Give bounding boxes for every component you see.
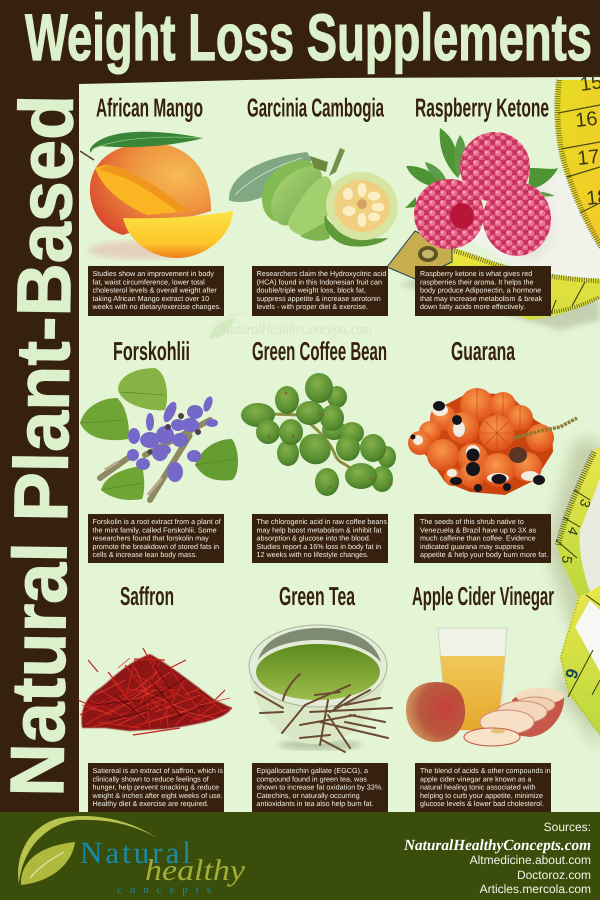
measuring tape: upper right: 16 xyxy=(574,108,599,132)
text: Green Coffee description: may help boost metabolism & inhibit fat xyxy=(256,525,382,534)
heading: Saffron: Saffron xyxy=(120,581,174,611)
text: Forskohlii description xyxy=(88,514,224,563)
text: Saffron description: hunger, help prevent snacking & reduce xyxy=(92,783,219,792)
text: Forskohlii description: researchers found that forskolin may xyxy=(92,534,209,543)
text: Green Tea description: compound found in green tea, was xyxy=(256,774,367,783)
text: Apple Cider description: glucose levels & lower bad cholesterol. xyxy=(420,799,544,808)
text: Forskohlii description: the mint family, called Forskohlii. Some xyxy=(92,525,217,534)
measuring tape: upper right: 17 xyxy=(576,146,600,170)
panel: Apple Cider Vinegar xyxy=(406,581,564,812)
text: Garcinia description: (HCA) found in this Indonesian fruit can xyxy=(256,277,382,286)
heading: Garcinia Cambogia: Garcinia Cambogia xyxy=(247,92,384,122)
logo: Natural Healthy Concepts: concepts xyxy=(117,884,211,896)
text: Saffron description: clinically shown to reduce feelings of xyxy=(92,774,209,783)
text: Guarana description: appetite & help your body burn more fat. xyxy=(420,550,548,559)
measuring tape: right side middle: 9 xyxy=(562,666,583,681)
icon: saffron pile xyxy=(78,648,232,735)
logo: Natural Healthy Concepts xyxy=(18,816,246,896)
text: Green Coffee description: The chlorogenic acid in raw coffee beans xyxy=(256,517,387,526)
text: Forskohlii description: promote the breakdown of stored fats in xyxy=(92,542,219,551)
text: Apple Cider description: natural healing tonic associated with xyxy=(420,783,535,792)
text: Garcinia description xyxy=(252,266,388,316)
text: Garcinia description: suppress appetite & increase serotonin xyxy=(256,294,381,303)
measuring tape: upper right xyxy=(470,71,600,282)
text: Green Coffee description: Studies report a 16% loss in body fat in xyxy=(256,542,381,551)
text: Saffron description: Healthy diet & exercise are required. xyxy=(92,799,209,808)
text: African Mango description xyxy=(88,266,224,316)
text: Green Coffee description xyxy=(252,514,388,563)
text: African Mango description: fat, waist circumference, lower total xyxy=(92,277,205,286)
text: Saffron description: Satiereal is an extract of saffron, which is xyxy=(92,766,223,775)
heading: Green Coffee Bean: Green Coffee Bean xyxy=(252,336,387,366)
text: Raspberry description: body produce Adiponectin, a hormone xyxy=(420,286,541,295)
text: Guarana description: indicated guarana may suppress xyxy=(420,542,524,551)
text: Saffron description xyxy=(88,763,224,812)
text: Raspberry description: that may increase metabolism & break xyxy=(420,294,543,303)
text: Garcinia description: Researchers claim the Hydroxycitric acid xyxy=(256,269,386,278)
icon: garcinia fruit xyxy=(229,148,406,248)
icon: guarana berries xyxy=(408,388,577,495)
text: Apple Cider description xyxy=(415,763,551,812)
text: African Mango description: weeks with no dietary/exercise changes. xyxy=(92,302,221,311)
text: Saffron description: weight & inches after eight weeks of use. xyxy=(92,791,223,800)
text: Apple Cider description: helping to curb your appetite, minimize xyxy=(420,791,543,800)
text: Guarana description: Venezuela & Brazil have up to 3X as xyxy=(420,525,537,534)
text: Apple Cider description: The blend of acids & other compounds in xyxy=(420,766,551,775)
watermark xyxy=(206,314,372,339)
panel: Guarana xyxy=(408,336,577,563)
text: Guarana description: The seeds of this shrub native to xyxy=(420,517,524,526)
text: Apple Cider description: apple cider vinegar are known as a xyxy=(420,774,531,783)
text: African Mango description: cholesterol levels & overall weight after xyxy=(92,286,217,295)
heading: Guarana: Guarana xyxy=(451,336,515,366)
measuring tape: right side middle: 3 xyxy=(576,497,594,510)
watermark: NaturalHealthyConcepts.com xyxy=(221,322,372,338)
icon: green coffee beans xyxy=(241,373,396,496)
text: Garcinia description: levels - with proper diet & exercise. xyxy=(256,302,368,311)
icon: forskohlii plant xyxy=(80,368,238,500)
icon: vinegar glass and apple xyxy=(406,628,564,746)
text: African Mango description: Studies show an improvement in body xyxy=(92,269,214,278)
text: Raspberry description xyxy=(415,266,551,316)
logo: Natural Healthy Concepts: Natural xyxy=(80,835,191,870)
icon: mango xyxy=(80,132,233,259)
sources list: Articles.mercola.com xyxy=(480,882,591,896)
panel: Raspberry Ketone xyxy=(405,92,558,316)
icon: green tea bowl xyxy=(249,625,392,752)
text: Guarana description: much caffeine than coffee. Evidence xyxy=(420,534,536,543)
measuring tape: right side middle: 4 xyxy=(564,525,582,538)
panel: Forskohlii xyxy=(80,336,238,563)
sources list: NaturalHealthyConcepts.com xyxy=(403,837,591,854)
text: Green Coffee description: 12 weeks with no lifestyle changes. xyxy=(256,550,369,559)
heading: Green Tea: Green Tea xyxy=(279,581,355,611)
measuring tape: lower band and metal tip xyxy=(387,231,600,330)
text: Green Tea description: shown to increase fat oxidation by 33%. xyxy=(256,783,383,792)
heading: African Mango: African Mango xyxy=(96,92,203,122)
text: Green Tea description xyxy=(252,763,388,812)
text: Forskohlii description: cells & increase lean body mass. xyxy=(92,550,197,559)
sources list: Doctoroz.com xyxy=(517,868,591,882)
sources list: Sources: xyxy=(544,820,591,834)
text: Guarana description xyxy=(414,514,551,563)
sources list xyxy=(403,820,591,896)
panel: Garcinia Cambogia xyxy=(229,92,406,316)
text: African Mango description: taking African Mango extract over 10 xyxy=(92,294,209,303)
text: Green Tea description: Catechins, or naturally occurring xyxy=(256,791,360,800)
icon: raspberries xyxy=(405,128,558,256)
panel: Saffron xyxy=(78,581,232,812)
logo: Natural Healthy Concepts: healthy xyxy=(145,854,246,887)
panel: Green Coffee Bean xyxy=(241,336,396,563)
text: Raspberry description: down fatty acids more effectively. xyxy=(420,302,525,311)
panel: main background xyxy=(79,77,600,813)
footer bar xyxy=(0,812,600,900)
text: Green Coffee description: absorption & glucose into the blood. xyxy=(256,534,371,543)
text: Forskohlii description: Forskolin is a root extract from a plant of xyxy=(92,517,221,526)
sources list: Altmedicine.about.com xyxy=(470,853,591,867)
measuring tape: right side middle xyxy=(545,440,600,750)
measuring tape: right side middle: 5 xyxy=(559,554,576,565)
text: Green Tea description: Epigallocatechin gallate (EGCG), a xyxy=(256,766,368,775)
text: Raspberry description: Raspberry ketone is what gives red xyxy=(420,269,532,278)
text: Green Tea description: antioxidants in tea also help burn fat. xyxy=(256,799,374,808)
heading: Forskohlii: Forskohlii xyxy=(113,336,190,366)
panel: Green Tea xyxy=(249,581,392,812)
text: Raspberry description: raspberries their aroma. It helps the xyxy=(420,277,533,286)
panel: African Mango xyxy=(80,92,233,316)
text: Garcinia description: double/triple weight loss, block fat, xyxy=(256,286,366,295)
